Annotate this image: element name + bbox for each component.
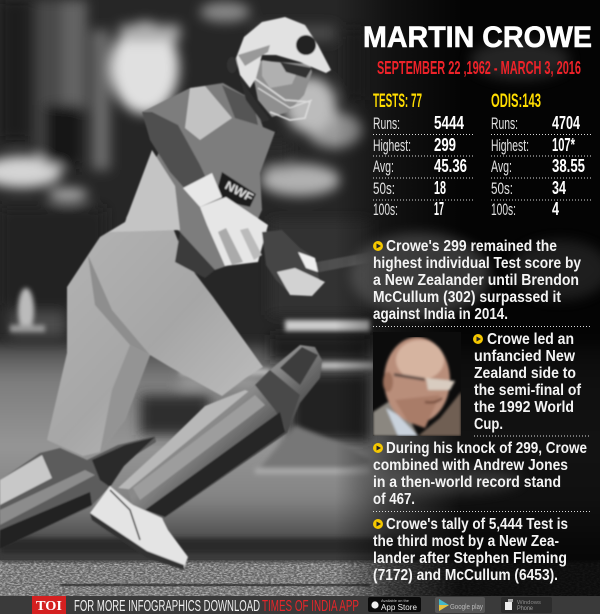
fact 4: lander after Stephen Fleming <box>373 550 567 567</box>
stats table: tests: Avg: <box>373 157 394 176</box>
stats table: odis <box>491 91 591 219</box>
odis heading: ODIS:143 <box>491 91 541 112</box>
player: batsman running <box>0 17 372 570</box>
wristband <box>183 173 222 207</box>
portrait figure <box>373 337 461 436</box>
shoe <box>90 486 188 570</box>
fact 2: the semi-final of <box>474 382 582 399</box>
stats table: tests: 45.36 <box>434 156 467 176</box>
glove <box>200 197 268 266</box>
left arm <box>142 112 206 190</box>
stats table: tests: 100s: <box>373 200 398 219</box>
badge: Windows Phone <box>501 597 552 613</box>
torso shirt <box>100 83 275 278</box>
stats table: odis: Runs: <box>491 114 518 133</box>
stats table: tests: 18 <box>434 178 446 198</box>
stats table: odis: Avg: <box>491 157 512 176</box>
bullet icon <box>373 241 383 251</box>
stats table: odis: 4704 <box>552 113 580 133</box>
badge: Google Play: Google play <box>450 604 483 611</box>
neck and face <box>240 60 312 122</box>
stats table: odis: 34 <box>552 178 566 198</box>
bat handle <box>312 252 372 273</box>
fact 4: (7172) and McCullum (6453). <box>373 567 558 584</box>
stats table: odis: 100s: <box>491 200 516 219</box>
fact 2: unfancied New <box>474 348 576 365</box>
stats table: tests: Runs: <box>373 114 400 133</box>
TOI logo <box>32 596 66 614</box>
fact 1: McCullum (302) surpassed it <box>373 289 561 306</box>
fact 1: against India in 2014. <box>373 306 508 323</box>
badge: App Store: App Store <box>381 603 418 612</box>
TOI logo: TOI <box>36 599 62 614</box>
fact 2: the 1992 World <box>474 399 574 416</box>
stats table: odis: 38.55 <box>552 156 585 176</box>
portrait photo of Martin Crowe <box>373 332 461 436</box>
stats table: odis: 50s: <box>491 179 513 198</box>
rear leg pad <box>0 436 156 549</box>
fact 3: of 467. <box>373 491 415 508</box>
stats table: tests: 17 <box>434 199 444 219</box>
fact 2: Crowe led an <box>487 331 574 348</box>
stats table: tests <box>373 91 473 219</box>
fact 3: in a then-world record stand <box>373 474 561 491</box>
fact 4: Crowe's tally of 5,444 Test is <box>386 516 568 533</box>
badge: Windows Phone: Windows <box>517 600 542 606</box>
stats table: tests: 299 <box>434 135 456 155</box>
front leg pad <box>128 345 322 519</box>
fact 4: the third most by a New Zea- <box>373 533 559 550</box>
stats table: tests: Highest: <box>373 136 411 155</box>
right hand glove <box>262 230 325 296</box>
title: MARTIN CROWE <box>363 21 592 54</box>
tests heading: TESTS: 77 <box>373 91 422 112</box>
fact 1: a New Zealander until Brendon <box>373 272 579 289</box>
helmet <box>227 17 331 88</box>
fact 1 <box>373 238 581 323</box>
fact 2 <box>473 331 582 433</box>
bullet icon <box>373 519 383 529</box>
dark gradient behind text column <box>335 0 460 596</box>
footer bar <box>0 596 600 614</box>
stats table: odis: 4 <box>552 199 559 219</box>
fact 4 <box>373 516 568 584</box>
shirt lettering: NWF <box>223 178 256 205</box>
bullet icon <box>473 334 483 344</box>
badge: App Store <box>368 597 421 612</box>
bullet icon <box>373 443 383 453</box>
badge: App Store: Available on the <box>381 598 410 603</box>
soft background tones behind text <box>350 40 600 494</box>
fact 1: Crowe's 299 remained the <box>386 238 557 255</box>
badge: Google Play <box>435 597 485 613</box>
stats table: odis: 107* <box>552 135 575 155</box>
stats table: odis: Highest: <box>491 136 529 155</box>
fact 2: Cup. <box>474 416 503 433</box>
fact 3 <box>373 440 587 508</box>
fact 2: Zealand side to <box>474 365 576 382</box>
stats table: tests: 5444 <box>434 113 464 133</box>
stats table: tests: 50s: <box>373 179 395 198</box>
fact 3: combined with Andrew Jones <box>373 457 568 474</box>
badge: Windows Phone: Phone <box>517 606 534 612</box>
trousers <box>47 228 263 490</box>
